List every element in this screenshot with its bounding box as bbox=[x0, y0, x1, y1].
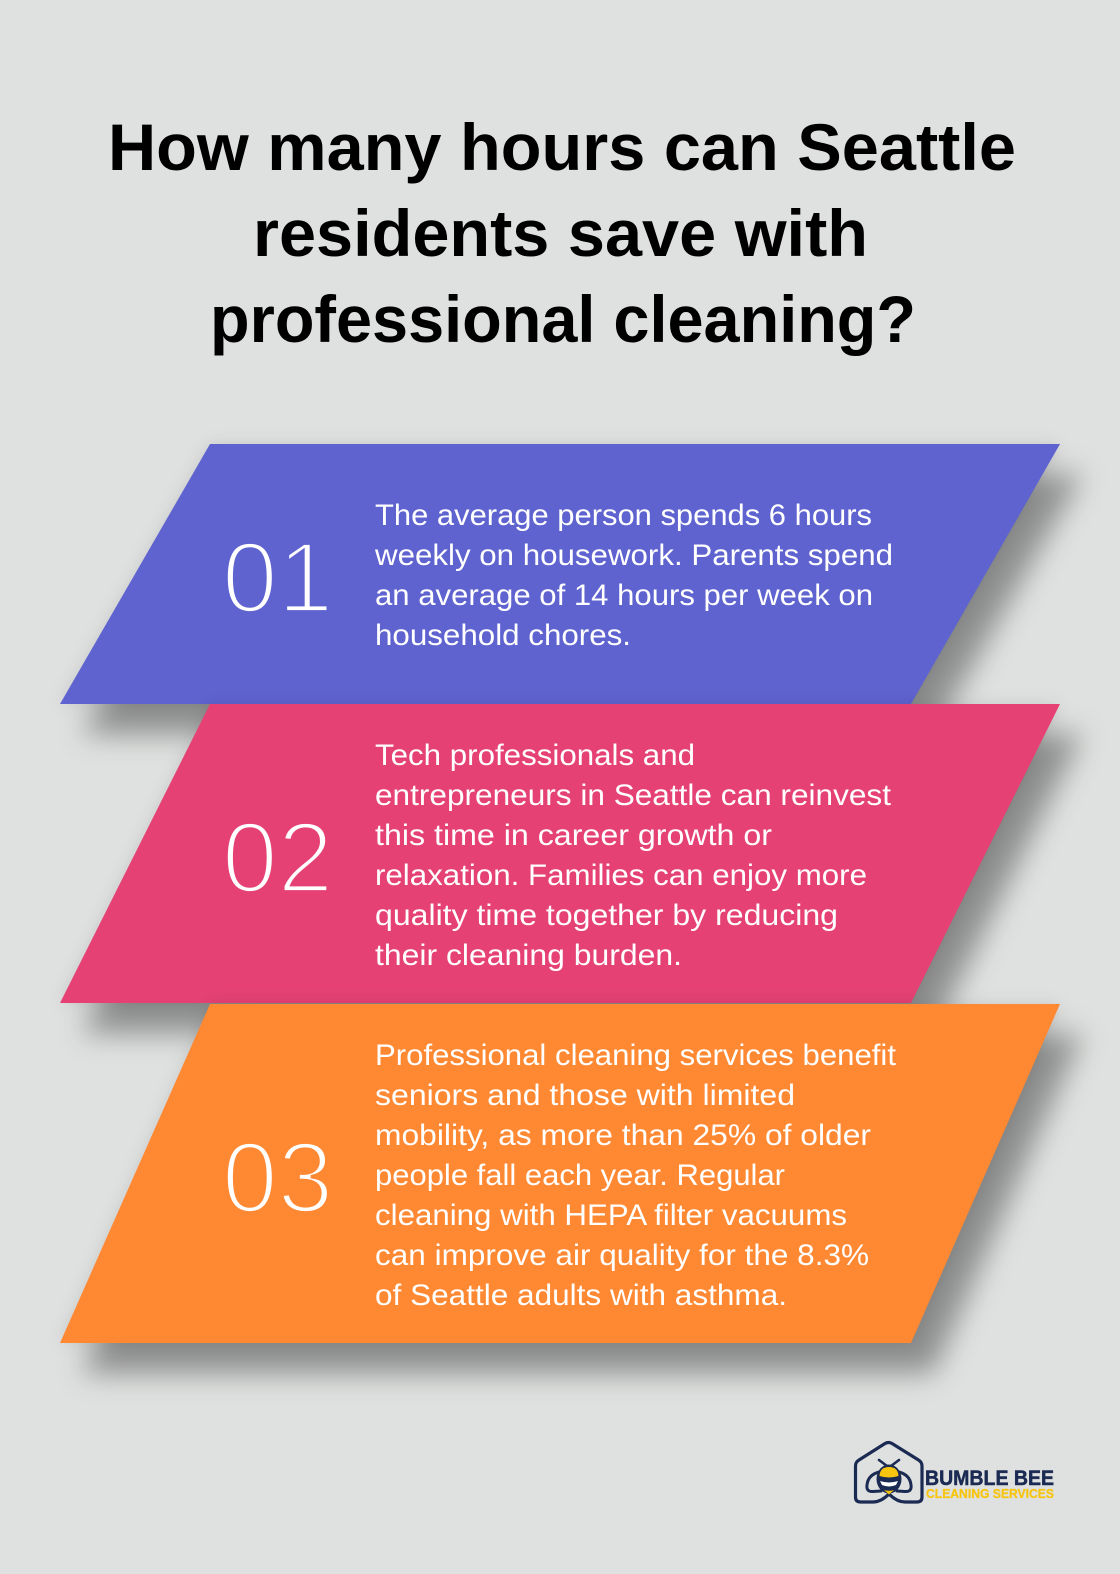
step 01 text: an average of 14 hours per week on bbox=[375, 579, 873, 612]
title: professional cleaning? bbox=[210, 283, 916, 356]
title: residents save with bbox=[253, 197, 868, 270]
step 03 text: cleaning with HEPA filter vacuums bbox=[375, 1199, 847, 1232]
step number 01: 01 bbox=[222, 522, 333, 634]
step 01 text: weekly on housework. Parents spend bbox=[374, 539, 893, 572]
step 03 text: Professional cleaning services benefit bbox=[375, 1039, 897, 1072]
step 02 text: entrepreneurs in Seattle can reinvest bbox=[375, 779, 892, 812]
icon: house outline with bee bbox=[856, 1442, 922, 1502]
panel: step 03 bbox=[60, 1004, 1082, 1373]
step 03 text: seniors and those with limited bbox=[375, 1079, 795, 1112]
title: How many hours can Seattle bbox=[108, 111, 1016, 184]
step 03 text: people fall each year. Regular bbox=[375, 1159, 785, 1192]
logo: Bumble Bee Cleaning Services bbox=[856, 1442, 1054, 1502]
step 03 text: can improve air quality for the 8.3% bbox=[375, 1239, 869, 1272]
panel shape: orange parallelogram bbox=[60, 1004, 1060, 1343]
step 02 text: Tech professionals and bbox=[375, 739, 695, 772]
panel shape: blue parallelogram bbox=[60, 444, 1060, 704]
step number 03: 03 bbox=[222, 1122, 333, 1234]
logo tagline: CLEANING SERVICES bbox=[926, 1487, 1054, 1501]
step 03 text: of Seattle adults with asthma. bbox=[375, 1279, 787, 1312]
step 02 text: relaxation. Families can enjoy more bbox=[375, 859, 867, 892]
panel: step 02 bbox=[60, 704, 1082, 1033]
step 02 text bbox=[375, 739, 892, 972]
panel shape: pink parallelogram bbox=[60, 704, 1060, 1003]
step number 02: 02 bbox=[222, 802, 333, 914]
panel: step 01 bbox=[60, 444, 1082, 734]
logo wordmark: BUMBLE BEE bbox=[925, 1467, 1054, 1490]
step 02 text: their cleaning burden. bbox=[375, 939, 682, 972]
step 03 text bbox=[375, 1039, 897, 1312]
step 02 text: quality time together by reducing bbox=[375, 899, 838, 932]
step 03 text: mobility, as more than 25% of older bbox=[375, 1119, 871, 1152]
title bbox=[108, 111, 1016, 356]
step 02 text: this time in career growth or bbox=[375, 819, 772, 852]
step 01 text: The average person spends 6 hours bbox=[375, 499, 872, 532]
step 01 text bbox=[374, 499, 893, 652]
step 01 text: household chores. bbox=[375, 619, 631, 652]
